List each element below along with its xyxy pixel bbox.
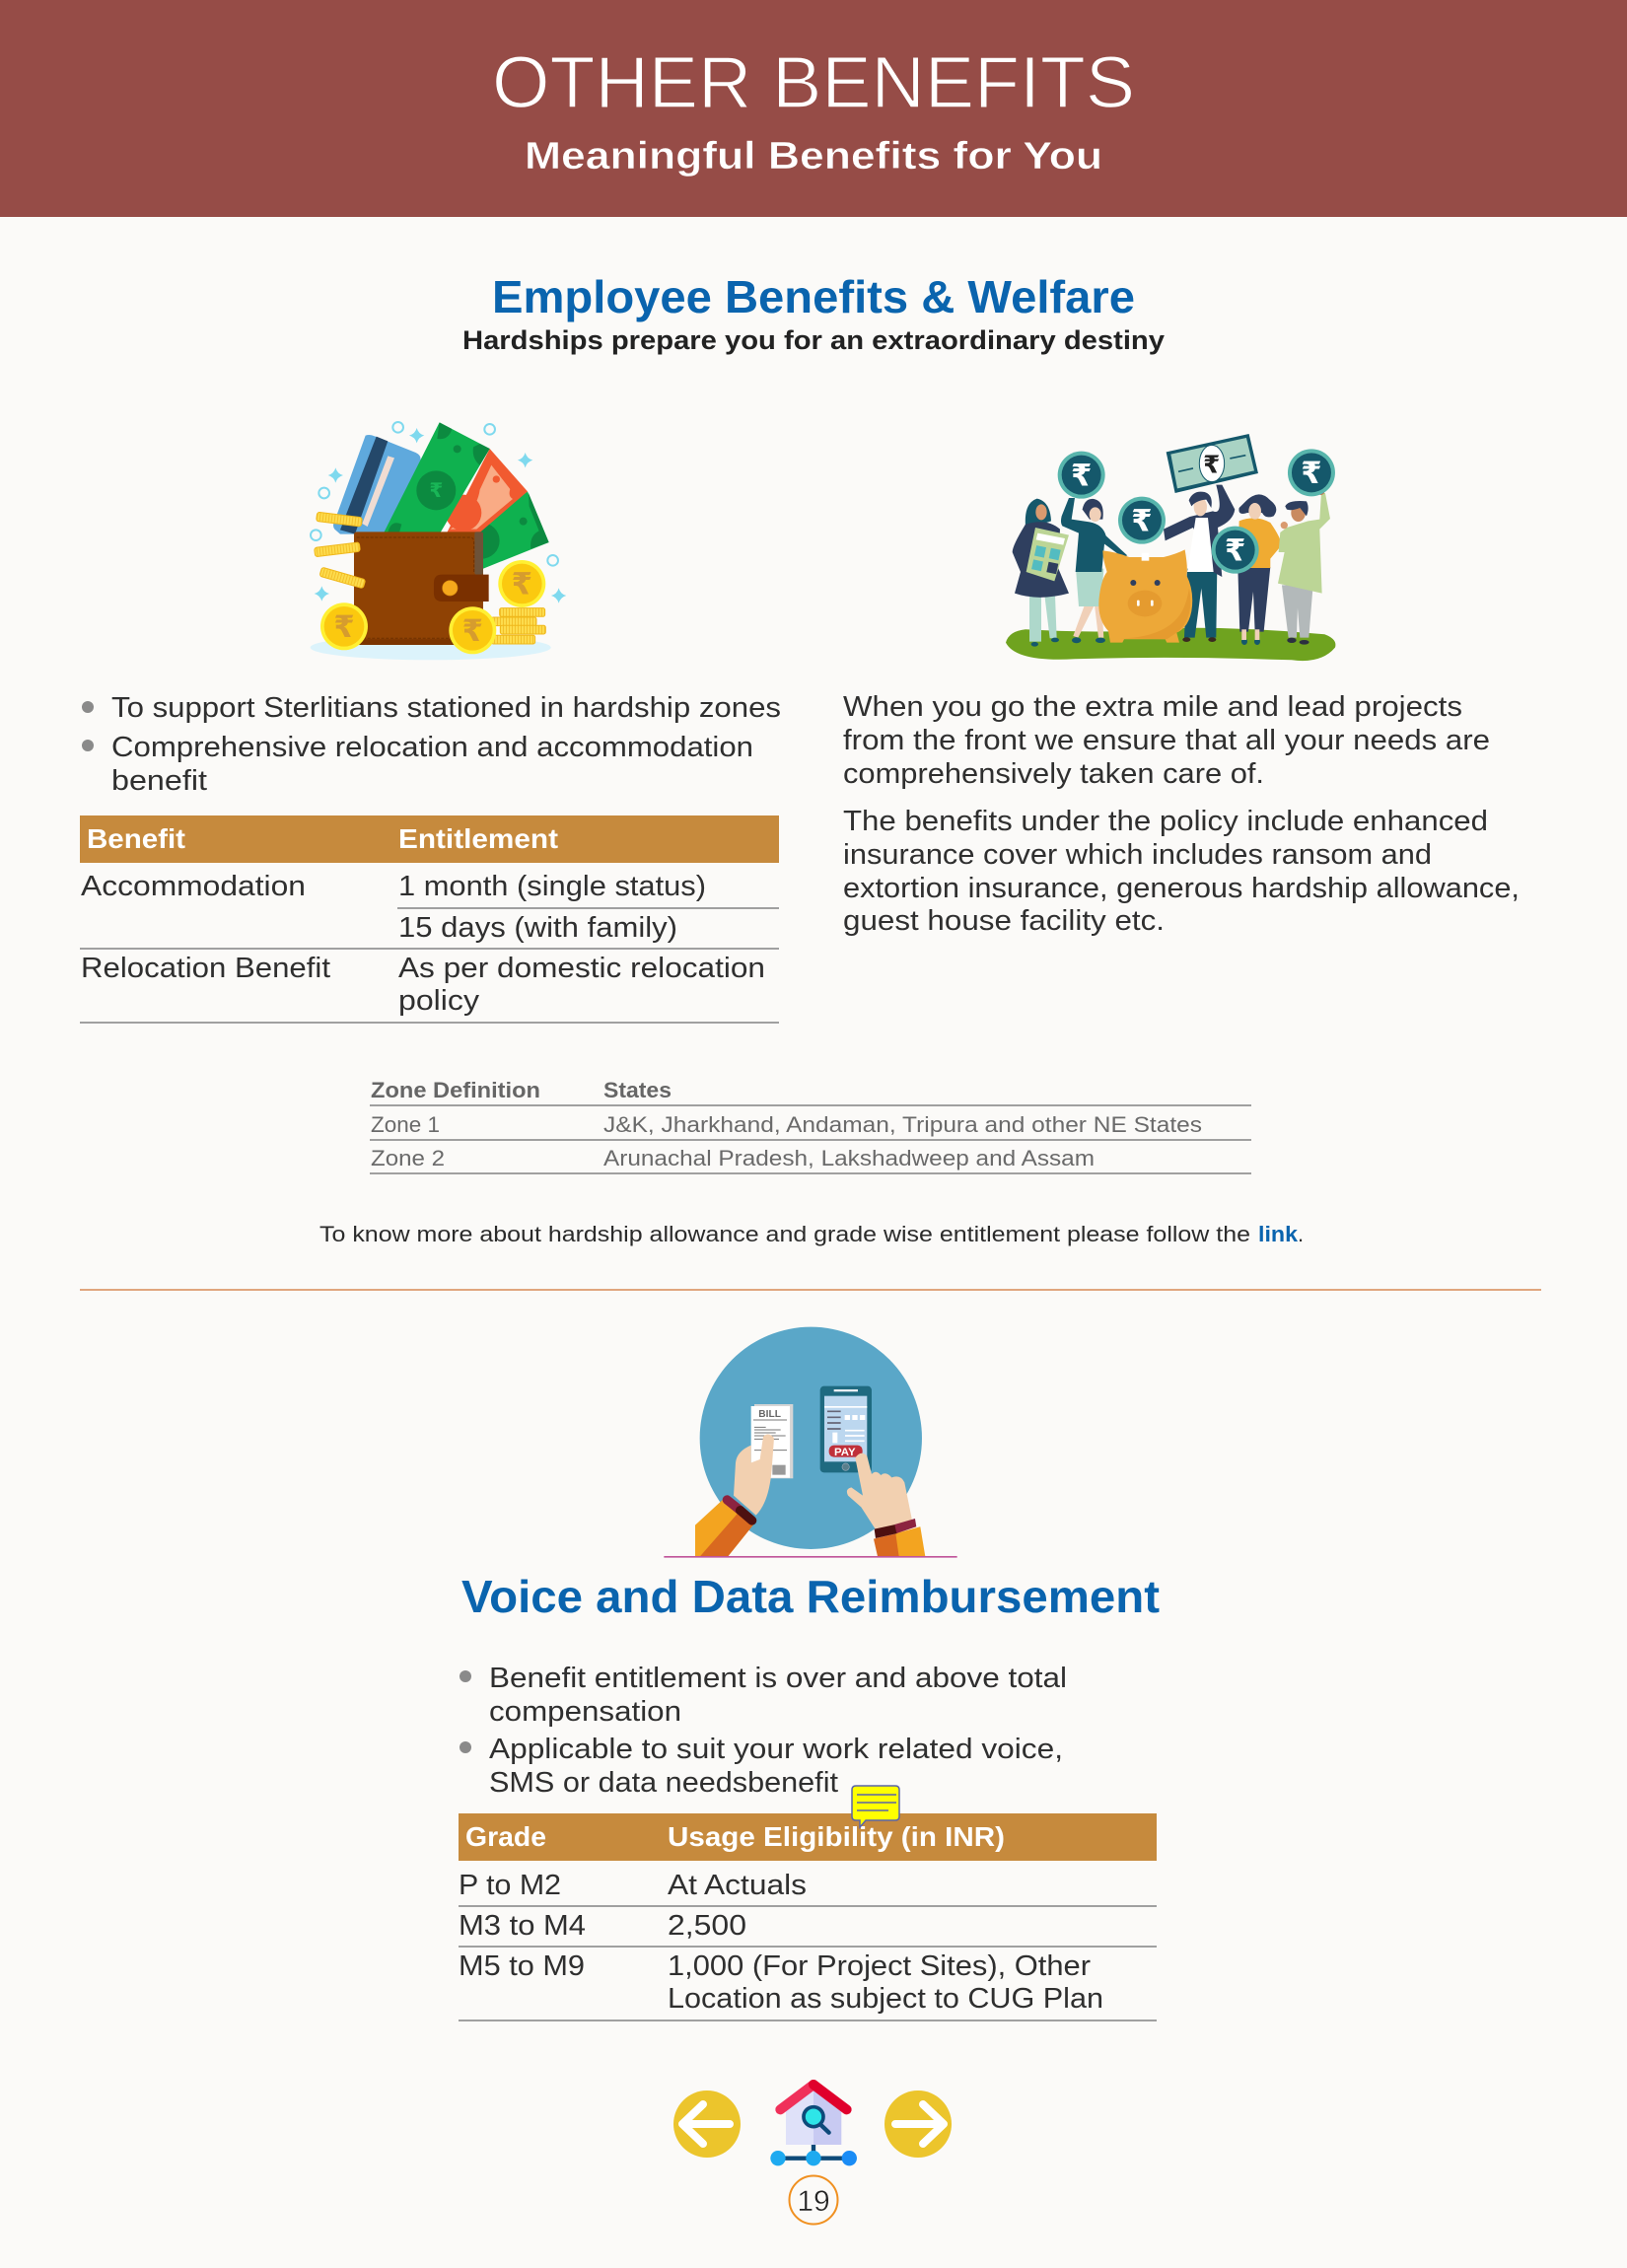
icon: people with piggy bank and rupee coins: ₹ xyxy=(1225,533,1245,568)
icon: people with piggy bank and rupee coins xyxy=(1006,434,1335,661)
text block: extra mile: comprehensively taken care of. xyxy=(843,758,1264,790)
icon: wallet with cash and coins: ₹ xyxy=(429,480,443,502)
icon: hands holding bill and paying by phone: BILL xyxy=(758,1409,781,1420)
table: grade and usage eligibility xyxy=(459,1813,1157,2021)
person 3 xyxy=(1184,569,1217,638)
table: zone definition xyxy=(370,1078,1251,1174)
bullet list: voice and data: SMS or data needsbenefit xyxy=(489,1767,838,1799)
table: benefit and entitlement: As per domestic relocation xyxy=(398,953,765,984)
heading: employee benefits: Employee Benefits & Welfare xyxy=(492,271,1135,322)
icon: people with piggy bank and rupee coins: ₹ xyxy=(1131,504,1153,538)
bullet list: voice and data: Benefit entitlement is over and above total xyxy=(489,1663,1067,1694)
icon: hands holding bill and paying by phone: PAY xyxy=(834,1447,856,1458)
table: zone definition: J&K, Jharkhand, Andaman, Tripura and other NE States xyxy=(603,1112,1202,1137)
table: grade and usage eligibility: M3 to M4 xyxy=(459,1910,586,1942)
table: grade and usage eligibility: Usage Eligibility (in INR) xyxy=(668,1821,1005,1852)
icon: people with piggy bank and rupee coins: ₹ xyxy=(1301,457,1322,491)
table: benefit and entitlement: policy xyxy=(398,985,480,1017)
note with link: To know more about hardship allowance and grade wise entitlement please follow the xyxy=(319,1222,1250,1246)
bullet list: hardship support: Comprehensive relocation and accommodation xyxy=(111,732,753,763)
icon: previous arrow xyxy=(673,2091,741,2158)
subtitle: Meaningful Benefits for You xyxy=(525,135,1102,177)
table: benefit and entitlement: Benefit xyxy=(87,823,185,854)
text block: policy benefits xyxy=(843,806,1520,937)
table: benefit and entitlement: Relocation Benefit xyxy=(81,953,330,984)
icon: home search with network xyxy=(770,2085,857,2165)
text block: extra mile: from the front we ensure that all your needs are xyxy=(843,725,1490,756)
icon: wallet with cash and coins: ₹ xyxy=(512,568,532,602)
page number: 19 xyxy=(797,2185,830,2218)
table: zone definition: Arunachal Pradesh, Lakshadweep and Assam xyxy=(603,1146,1095,1170)
table: benefit and entitlement: Entitlement xyxy=(398,823,558,854)
text block: extra mile: When you go the extra mile and lead projects xyxy=(843,691,1462,723)
table: grade and usage eligibility: 1,000 (For Project Sites), Other xyxy=(668,1950,1091,1982)
subheading: Hardships prepare you for an extraordinary destiny xyxy=(462,325,1165,355)
person 1 xyxy=(1026,499,1051,528)
title: OTHER BENEFITS xyxy=(492,41,1135,123)
bullet list: voice and data: compensation xyxy=(489,1696,681,1728)
table: grade and usage eligibility: M5 to M9 xyxy=(459,1950,585,1982)
text block: extra mile xyxy=(843,691,1490,790)
table: grade and usage eligibility: P to M2 xyxy=(459,1870,561,1901)
piggy bank xyxy=(1098,549,1192,643)
table: grade and usage eligibility: At Actuals xyxy=(668,1870,807,1901)
text block: policy benefits: insurance cover which includes ransom and xyxy=(843,839,1432,871)
icon: hands holding bill and paying by phone xyxy=(664,1327,957,1558)
person 5 xyxy=(1282,585,1313,638)
icon: wallet with cash and coins xyxy=(311,422,566,660)
note with link: . xyxy=(1298,1222,1304,1246)
table: zone definition: Zone 2 xyxy=(371,1146,445,1170)
text block: policy benefits: guest house facility etc. xyxy=(843,905,1165,937)
icon: yellow comment note xyxy=(852,1786,899,1827)
header banner xyxy=(0,0,1627,217)
icon: next arrow xyxy=(884,2091,952,2158)
bullet list: hardship support: To support Sterlitians stationed in hardship zones xyxy=(111,692,781,724)
table: benefit and entitlement: 1 month (single status) xyxy=(398,871,706,902)
table: zone definition: States xyxy=(603,1078,672,1102)
person 2 xyxy=(1073,604,1103,638)
table: grade and usage eligibility: Location as subject to CUG Plan xyxy=(668,1983,1103,2015)
table: benefit and entitlement: 15 days (with family) xyxy=(398,912,677,944)
table: benefit and entitlement: Accommodation xyxy=(81,871,306,902)
table: benefit and entitlement xyxy=(80,815,779,1024)
bullet list: hardship support: benefit xyxy=(111,765,207,797)
text block: policy benefits: The benefits under the policy include enhanced xyxy=(843,806,1488,837)
table: grade and usage eligibility: 2,500 xyxy=(668,1910,746,1942)
note with link: link xyxy=(1258,1222,1299,1246)
bullet list: voice and data: Applicable to suit your work related voice, xyxy=(489,1734,1063,1765)
rupee coins xyxy=(1058,452,1105,499)
icon: people with piggy bank and rupee coins: ₹ xyxy=(1203,450,1220,478)
table: zone definition: Zone 1 xyxy=(371,1112,440,1137)
icon: wallet with cash and coins: ₹ xyxy=(333,610,355,645)
bullet list: hardship support xyxy=(82,692,781,797)
table: zone definition: Zone Definition xyxy=(371,1078,540,1102)
bullet list: voice and data xyxy=(460,1663,1067,1799)
page number xyxy=(789,2175,838,2225)
heading: voice and data: Voice and Data Reimbursement xyxy=(461,1571,1160,1622)
icon: people with piggy bank and rupee coins: ₹ xyxy=(1071,459,1092,493)
text block: policy benefits: extortion insurance, generous hardship allowance, xyxy=(843,873,1520,904)
icon: wallet with cash and coins: ₹ xyxy=(462,614,483,649)
table: grade and usage eligibility: Grade xyxy=(465,1821,546,1852)
person 4 xyxy=(1238,567,1270,632)
